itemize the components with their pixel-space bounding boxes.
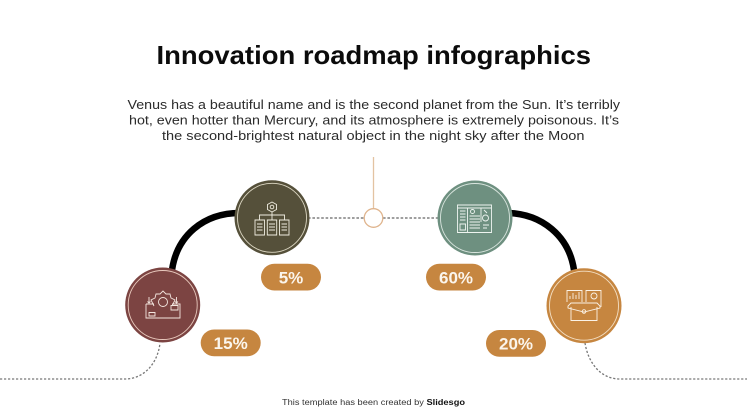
icon: hierarchy of documents [255,202,289,235]
description text: the second-brightest natural object in the night sky after the Moon [162,128,584,143]
node: green circle with dashboard icon [438,180,512,256]
node: red circle with camera-gear icon [125,268,200,342]
node: orange circle with briefcase icon [546,268,622,343]
center dashed connector [308,217,440,219]
pill: 5% [261,264,321,290]
right dashed path [585,343,747,379]
description text [128,97,621,143]
pill: 60% [426,264,486,290]
left black arc [172,213,240,270]
footer credit: This template has been created by Slidesgo [282,398,465,407]
pill: 60%: 60% [439,268,473,287]
description text: hot, even hotter than Mercury, and its atmosphere is extremely poisonous. It’s [129,112,620,128]
pill: 5%: 5% [279,268,303,287]
left dashed path [0,343,160,379]
icon: dashboard panel [458,205,492,232]
pill: 15% [201,330,261,356]
pill: 15%: 15% [214,334,248,353]
icon: briefcase with charts [567,290,601,320]
pill: 20%: 20% [499,334,533,354]
node: olive circle with hierarchy icon [234,180,310,255]
center vertical line and node [364,157,383,227]
description text: Venus has a beautiful name and is the second planet from the Sun. It’s terribly [128,97,621,112]
title: Innovation roadmap infographics [156,40,591,70]
right black arc [508,213,574,270]
icon: gear over tray [146,291,180,318]
pill: 20% [486,330,546,357]
